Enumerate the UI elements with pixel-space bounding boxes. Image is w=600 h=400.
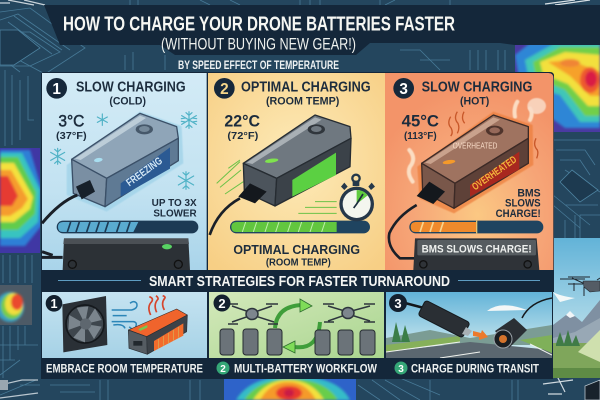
strategy 1: embrace room temperature xyxy=(42,292,207,358)
icon: arrow xyxy=(473,330,488,340)
panel: slow charging cold xyxy=(42,73,207,270)
number badge 1: 1 xyxy=(52,81,61,98)
icon: frozen battery xyxy=(42,112,183,223)
icon: frozen battery: FREEZING xyxy=(124,155,165,189)
heading: SLOW CHARGING xyxy=(76,80,186,96)
speed lines xyxy=(217,160,337,213)
number badge 3: 3 xyxy=(399,81,408,98)
number badge: 1 xyxy=(50,297,58,311)
icon: warm battery xyxy=(128,296,187,354)
icon: charger with warning: BMS SLOWS CHARGE! xyxy=(422,243,532,255)
icon: overheated battery xyxy=(389,112,533,258)
temperature: 22°C xyxy=(224,112,260,131)
heading: OPTIMAL CHARGING xyxy=(241,80,371,96)
caption: multi-battery workflow: MULTI-BATTERY WORKFLOW xyxy=(234,362,378,376)
drone: bottom left xyxy=(0,380,38,398)
temperature xyxy=(402,112,439,142)
panel: optimal charging xyxy=(208,73,385,270)
caption xyxy=(152,198,197,220)
number badge 2: 2 xyxy=(220,81,229,98)
icon: air flow xyxy=(112,302,137,329)
caption: CHARGE! xyxy=(496,208,541,220)
temperature: 3°C xyxy=(58,112,84,131)
heatmap: chip xyxy=(0,285,32,325)
heading: SLOW CHARGING xyxy=(422,80,532,96)
strategy 3: charge during transit xyxy=(386,292,552,358)
subheading: (COLD) xyxy=(109,95,146,107)
progress bar xyxy=(57,221,198,233)
number badge: 2 xyxy=(218,296,226,311)
icon: left drone xyxy=(227,304,278,324)
temperature: (72°F) xyxy=(227,131,258,142)
caption: SLOWER xyxy=(153,209,197,220)
icon: left batteries xyxy=(220,329,282,355)
caption: (ROOM TEMP) xyxy=(266,258,331,269)
strategies band heading: SMART STRATEGIES FOR FASTER TURNAROUND xyxy=(149,273,450,290)
icon: charger xyxy=(42,238,190,270)
icon: overheated battery: OVERHEATED xyxy=(470,154,519,193)
caption: charge during transit: 3 xyxy=(398,364,404,375)
progress bar xyxy=(230,221,370,233)
icon: 12V plug xyxy=(405,300,472,338)
icon: cycle arrows xyxy=(275,305,320,347)
title: HOW TO CHARGE YOUR DRONE BATTERIES FASTER xyxy=(63,14,455,36)
icon: snowflakes xyxy=(51,112,197,189)
caption: BMS xyxy=(517,188,541,200)
landscape panel: right xyxy=(553,238,600,378)
strategy 2: multi-battery workflow xyxy=(209,292,384,358)
number badge xyxy=(389,294,407,312)
icon: charger with warning xyxy=(413,238,539,270)
caption xyxy=(233,242,360,269)
drone: top left xyxy=(0,0,45,5)
strategy frame xyxy=(41,290,553,379)
temperature: (37°F) xyxy=(56,131,87,142)
number badge 3 xyxy=(393,78,414,99)
title banner xyxy=(44,5,600,55)
caption xyxy=(496,188,541,220)
heatmap: top right xyxy=(515,43,600,132)
icon: fan xyxy=(62,296,107,352)
number badge 1 xyxy=(46,78,67,99)
caption: multi-battery workflow: 2 xyxy=(220,364,226,375)
progress bar xyxy=(409,221,543,233)
heatmap: bottom xyxy=(224,379,356,400)
caption: UP TO 3X xyxy=(152,198,197,209)
caption: charge during transit: CHARGE DURING TRANSIT xyxy=(411,362,540,376)
panel: slow charging hot xyxy=(385,73,553,270)
number badge xyxy=(214,294,230,312)
icon: green battery xyxy=(210,115,351,235)
subheading: (HOT) xyxy=(460,95,490,107)
icon: stopwatch xyxy=(339,175,375,221)
number badge: 3 xyxy=(394,296,402,311)
caption: embrace room temperature: EMBRACE ROOM TEMPERATURE xyxy=(46,362,203,376)
temperature xyxy=(224,112,260,142)
temperature: (113°F) xyxy=(404,131,437,142)
drone: top right xyxy=(545,0,590,5)
icon: heat waves and smoke xyxy=(409,98,546,182)
heatmap: left xyxy=(0,148,42,253)
main frame xyxy=(41,72,554,292)
temperature xyxy=(56,112,87,142)
subtitle: (WITHOUT BUYING NEW GEAR!) xyxy=(161,34,356,54)
icon: cycle arrowheads xyxy=(283,299,312,353)
subheading: (ROOM TEMP) xyxy=(266,95,340,107)
icon: right batteries xyxy=(315,330,375,355)
number badge 2 xyxy=(214,78,235,99)
temperature: 45°C xyxy=(402,112,439,131)
drone: bottom right xyxy=(543,376,600,400)
icon: overheated battery: OVERHEATED xyxy=(453,140,497,150)
icon: right drone xyxy=(323,304,375,322)
icon: socket xyxy=(494,298,552,348)
caption: SLOWS xyxy=(505,198,541,210)
number badge xyxy=(46,295,62,312)
caption: OPTIMAL CHARGING xyxy=(233,242,360,257)
section label: BY SPEED EFFECT OF TEMPERATURE xyxy=(178,58,339,72)
